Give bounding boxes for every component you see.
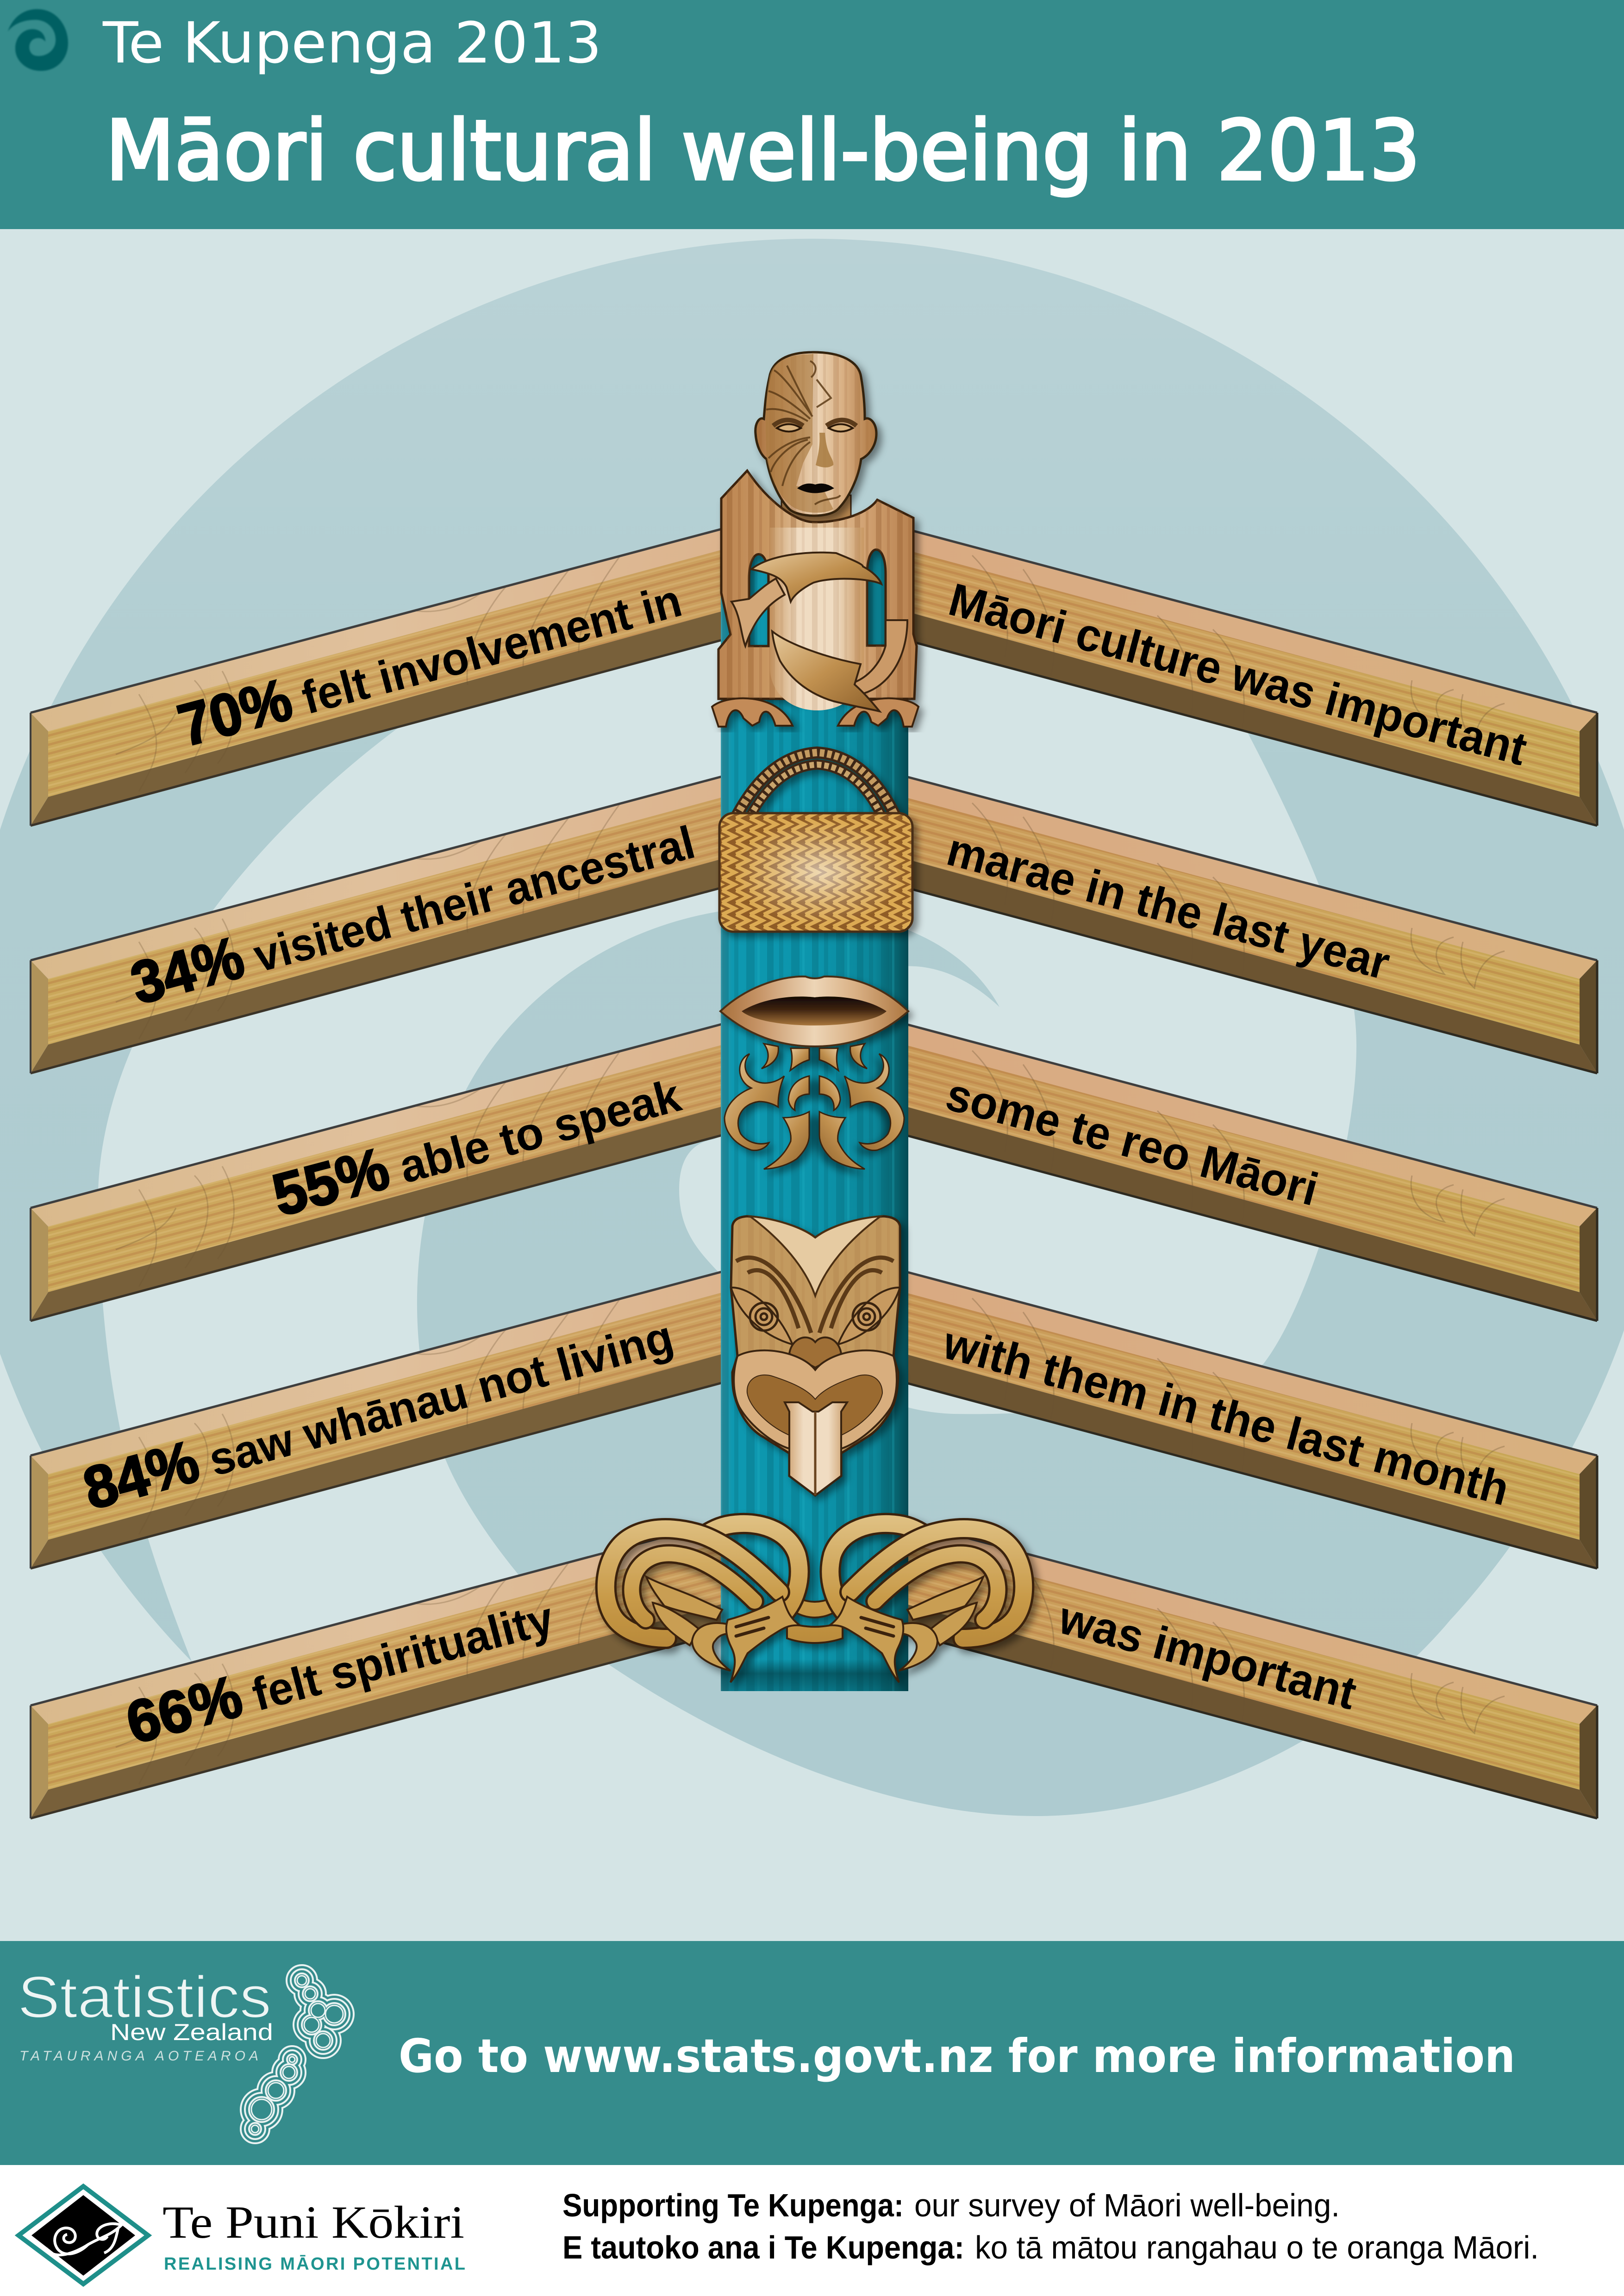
tongue <box>785 1402 847 1495</box>
bar 3 left: 55% able to speak: 55% able to speak <box>266 1058 687 1229</box>
left arm <box>731 579 785 646</box>
bar 2 right: marae in the last year <box>901 775 1597 1073</box>
lips <box>720 977 908 1046</box>
bar 5 right: was important: was important <box>1053 1592 1362 1719</box>
supporting text: ko tā mātou rangahau o te oranga Māori. <box>975 2229 1539 2265</box>
ornament right half <box>819 1044 904 1169</box>
bar 1 right: Māori culture was important: Māori culture was important <box>943 573 1532 776</box>
carving: lips with ornament <box>720 977 908 1169</box>
moko tattoo <box>766 354 833 513</box>
icon: koru spiral <box>8 9 68 71</box>
mouth <box>797 484 834 493</box>
call to action: Go to www.stats.govt.nz for more information <box>399 2029 1515 2083</box>
bar 4 right: with them in the last month: with them in the last month <box>937 1317 1514 1516</box>
carving: manaia knot <box>606 1524 1024 1682</box>
bar 4 right: with them in the last month <box>901 1270 1597 1568</box>
supporting text: Supporting Te Kupenga: <box>562 2187 904 2223</box>
knot left half <box>606 1524 800 1682</box>
organisation name: Te Puni Kōkiri <box>162 2196 464 2248</box>
basket handle <box>736 753 896 817</box>
bar 3 right: some te reo Māori: some te reo Māori <box>941 1068 1324 1216</box>
forehead V <box>750 1216 881 1296</box>
logo wordmark: Statistics New Zealand <box>18 1964 273 2064</box>
footer band <box>0 1941 1624 2165</box>
brow curves <box>736 1257 893 1333</box>
ornament left half <box>725 1044 809 1169</box>
basket body <box>719 813 912 932</box>
subtitle: Te Kupenga 2013 <box>102 10 602 76</box>
title: Māori cultural well-being in 2013 <box>106 103 1420 199</box>
logo wordmark: Statistics New Zealand: TATAURANGA AOTEAROA <box>19 2048 258 2064</box>
bar 5 left: 66% felt spirituality: 66% felt spirituality <box>120 1580 560 1756</box>
carving: figure with moko face <box>712 352 918 727</box>
icon: New Zealand map rings <box>251 1976 343 2133</box>
nose <box>789 1338 841 1368</box>
supporting text: E tautoko ana i Te Kupenga: <box>562 2229 964 2265</box>
bar 1 left: 70% felt involvement in <box>31 528 727 826</box>
bar 4 left: 84% saw whānau not living: 84% saw whānau not living <box>77 1300 680 1522</box>
right hook arm <box>849 620 907 695</box>
icon: diamond <box>19 2186 148 2284</box>
head <box>756 352 876 516</box>
bar 1 right: Māori culture was important <box>901 528 1597 826</box>
neck <box>781 495 851 528</box>
lower claw <box>772 631 880 711</box>
mask outline <box>731 1216 900 1495</box>
carving: tiki mask <box>731 1216 900 1495</box>
bar 2 left: 34% visited their ancestral: 34% visited their ancestral <box>125 805 701 1017</box>
nose <box>816 433 833 467</box>
knot centre bands <box>787 1598 843 1643</box>
bar 4 left: 84% saw whānau not living <box>31 1270 727 1568</box>
upper claw <box>751 553 881 602</box>
bar 3 left: 55% able to speak <box>31 1023 727 1321</box>
supporting text: our survey of Māori well-being. <box>914 2187 1340 2223</box>
tagline: REALISING MĀORI POTENTIAL <box>164 2254 465 2274</box>
knot claws left <box>646 1577 800 1682</box>
eyes <box>731 1288 900 1344</box>
logo wordmark: Statistics New Zealand: New Zealand <box>110 2019 273 2045</box>
bar 1 left: 70% felt involvement in: 70% felt involvement in <box>172 563 687 759</box>
base scallops <box>712 698 918 727</box>
cream body <box>770 528 864 710</box>
central teal pole <box>721 546 908 1691</box>
carving: woven kete basket <box>719 753 912 932</box>
logo wordmark: Statistics New Zealand: Statistics <box>18 1964 271 2030</box>
knot right half <box>830 1524 1024 1682</box>
supporting text <box>562 2187 1539 2265</box>
header band <box>0 0 1624 229</box>
torso plate <box>718 471 917 699</box>
bar 2 left: 34% visited their ancestral <box>31 775 727 1073</box>
background panel <box>0 229 1624 1941</box>
mouth ring <box>734 1350 897 1449</box>
bar 5 right: was important <box>901 1520 1597 1818</box>
bar 5 left: 66% felt spirituality <box>31 1520 727 1818</box>
koru spiral background <box>0 239 1624 1816</box>
eyes and brows <box>773 420 856 426</box>
bar 3 right: some te reo Māori <box>901 1023 1597 1321</box>
logo: Te Puni Kōkiri <box>19 2186 465 2284</box>
white footer strip <box>0 2165 1624 2296</box>
bar 2 right: marae in the last year: marae in the last year <box>942 823 1395 989</box>
